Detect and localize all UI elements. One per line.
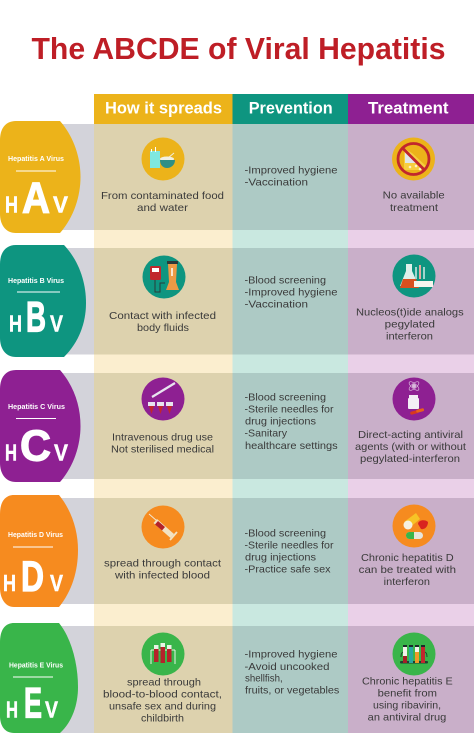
text: how it spreads, hepatitis E: spread through bbox=[127, 676, 201, 688]
column header: How it spreads bbox=[94, 94, 232, 124]
text: treatment, hepatitis E bbox=[362, 676, 453, 724]
text: how it spreads, hepatitis E: unsafe sex and during bbox=[109, 700, 216, 712]
text: how it spreads, hepatitis D bbox=[104, 558, 221, 582]
icon: syringe and vials bbox=[142, 378, 184, 420]
badge: Hepatitis C bbox=[0, 370, 80, 482]
text: treatment, hepatitis D: Chronic hepatitis D bbox=[361, 552, 454, 564]
text: prevention, hepatitis B: -Blood screening bbox=[244, 274, 326, 286]
text: prevention, hepatitis B: -Vaccination bbox=[244, 298, 308, 310]
text: prevention, hepatitis C: -Sterile needles for bbox=[244, 404, 334, 416]
text: prevention, hepatitis B bbox=[244, 274, 338, 310]
column header: How it spreads: How it spreads bbox=[105, 98, 222, 118]
text: prevention, hepatitis D: -Sterile needles for bbox=[244, 540, 334, 552]
text: treatment, hepatitis E: Chronic hepatitis E bbox=[362, 676, 453, 688]
icon: food and water bbox=[142, 138, 184, 180]
text: prevention, hepatitis A: -Improved hygiene bbox=[244, 164, 338, 176]
column header: Treatment: Treatment bbox=[368, 98, 449, 118]
text: treatment, hepatitis C: Direct-acting antiviral bbox=[358, 429, 463, 441]
badge: Hepatitis B: B bbox=[26, 293, 46, 341]
badge: Hepatitis C: C bbox=[20, 421, 51, 470]
text: treatment, hepatitis A: treatment bbox=[390, 202, 438, 214]
text: prevention, hepatitis C bbox=[244, 392, 338, 452]
text: prevention, hepatitis C: -Sanitary bbox=[244, 428, 288, 440]
text: how it spreads, hepatitis B: Contact with infected bbox=[109, 310, 216, 322]
text: treatment, hepatitis B: Nucleos(t)ide analogs bbox=[356, 306, 464, 318]
text: how it spreads, hepatitis E bbox=[103, 676, 222, 724]
text: how it spreads, hepatitis A: and water bbox=[137, 202, 189, 214]
text: treatment, hepatitis E: using ribavirin, bbox=[373, 700, 441, 712]
icon: blood bag and arm bbox=[142, 256, 186, 298]
text: how it spreads, hepatitis E: blood-to-blood contact, bbox=[103, 688, 222, 700]
text: how it spreads, hepatitis B: body fluids bbox=[137, 322, 189, 334]
badge: Hepatitis E: V bbox=[45, 696, 59, 722]
text: prevention, hepatitis D: drug injections bbox=[245, 552, 316, 564]
text: treatment, hepatitis D bbox=[359, 552, 456, 588]
text: treatment, hepatitis B: pegylated bbox=[385, 319, 435, 331]
text: prevention, hepatitis C: -Blood screening bbox=[244, 392, 326, 404]
text: treatment, hepatitis B: interferon bbox=[386, 330, 433, 342]
icon: coloured test tubes bbox=[392, 632, 436, 676]
badge: Hepatitis C: V bbox=[54, 439, 69, 465]
icon: no treatment bbox=[392, 138, 435, 180]
text: treatment, hepatitis B bbox=[356, 306, 464, 342]
text: prevention, hepatitis E bbox=[244, 649, 339, 697]
badge: Hepatitis D: V bbox=[50, 570, 64, 596]
badge: Hepatitis B bbox=[0, 245, 86, 357]
text: prevention, hepatitis C: healthcare settings bbox=[245, 440, 338, 452]
badge: Hepatitis D bbox=[0, 495, 78, 607]
text: treatment, hepatitis C bbox=[355, 429, 466, 465]
text: prevention, hepatitis E: -Avoid uncooked bbox=[244, 661, 330, 673]
column header: Prevention bbox=[232, 94, 348, 124]
text: treatment, hepatitis A bbox=[383, 190, 445, 214]
badge: Hepatitis E: H bbox=[6, 696, 18, 722]
text: how it spreads, hepatitis D: with infected blood bbox=[114, 570, 210, 582]
text: treatment, hepatitis C: pegylated-interferon bbox=[360, 453, 460, 465]
text: treatment, hepatitis A: No available bbox=[383, 190, 445, 202]
badge: Hepatitis A bbox=[0, 121, 80, 233]
text: how it spreads, hepatitis C bbox=[111, 432, 214, 456]
badge: Hepatitis A: A bbox=[22, 174, 50, 223]
text: prevention, hepatitis D bbox=[244, 528, 334, 576]
badge: Hepatitis C: Hepatitis C Virus bbox=[8, 404, 65, 411]
row bands bbox=[50, 124, 474, 733]
badge: Hepatitis D: H bbox=[3, 570, 16, 596]
text: prevention, hepatitis A bbox=[244, 164, 338, 188]
text: how it spreads, hepatitis C: Intravenous drug use bbox=[112, 432, 213, 444]
icon: pills bbox=[392, 504, 436, 548]
badge: Hepatitis A: Hepatitis A Virus bbox=[8, 156, 64, 163]
icon: syringe bbox=[142, 506, 184, 548]
text: prevention, hepatitis E: -Improved hygiene bbox=[244, 649, 338, 661]
badge: Hepatitis B: H bbox=[9, 310, 22, 336]
icon: flask bbox=[392, 254, 436, 298]
text: how it spreads, hepatitis A: From contaminated food bbox=[101, 190, 224, 202]
badge: Hepatitis E: Hepatitis E Virus bbox=[9, 663, 63, 670]
badge: Hepatitis D: D bbox=[21, 553, 44, 601]
text: how it spreads, hepatitis D: spread through contact bbox=[104, 558, 221, 570]
text: treatment, hepatitis E: an antiviral drug bbox=[368, 712, 446, 724]
badge: Hepatitis B: V bbox=[50, 310, 64, 336]
column tint backgrounds bbox=[94, 124, 474, 733]
badge: Hepatitis B: Hepatitis B Virus bbox=[8, 278, 64, 285]
text: treatment, hepatitis E: benefit from bbox=[378, 688, 437, 700]
column header: Treatment bbox=[348, 94, 474, 124]
text: prevention, hepatitis E: shellfish, bbox=[245, 673, 283, 685]
text: treatment, hepatitis C: agents (with or without bbox=[355, 441, 466, 453]
text: how it spreads, hepatitis E: childbirth bbox=[141, 712, 184, 724]
badge: Hepatitis C: H bbox=[5, 439, 17, 465]
badge: Hepatitis E: E bbox=[24, 679, 42, 727]
text: prevention, hepatitis B: -Improved hygiene bbox=[244, 287, 338, 299]
text: prevention, hepatitis D: -Blood screening bbox=[244, 528, 326, 540]
text: how it spreads, hepatitis B bbox=[109, 310, 216, 334]
text: prevention, hepatitis C: drug injections bbox=[245, 416, 316, 428]
text: how it spreads, hepatitis C: Not sterilised medical bbox=[111, 444, 214, 456]
text: prevention, hepatitis A: -Vaccination bbox=[244, 176, 308, 188]
text: how it spreads, hepatitis A bbox=[101, 190, 224, 214]
title: The ABCDE of Viral Hepatitis bbox=[32, 32, 446, 66]
text: prevention, hepatitis D: -Practice safe sex bbox=[244, 564, 331, 576]
badge: Hepatitis D: Hepatitis D Virus bbox=[8, 532, 63, 539]
badge: Hepatitis A: V bbox=[53, 192, 69, 218]
text: prevention, hepatitis E: fruits, or vegetables bbox=[245, 685, 339, 697]
icon: blood test tubes bbox=[142, 632, 184, 676]
text: treatment, hepatitis D: can be treated with bbox=[359, 564, 456, 576]
icon: medicine bottle bbox=[392, 378, 436, 420]
badge: Hepatitis E bbox=[0, 623, 78, 733]
badge: Hepatitis A: H bbox=[5, 192, 18, 218]
column header: Prevention: Prevention bbox=[249, 98, 333, 118]
text: treatment, hepatitis D: interferon bbox=[384, 576, 430, 588]
